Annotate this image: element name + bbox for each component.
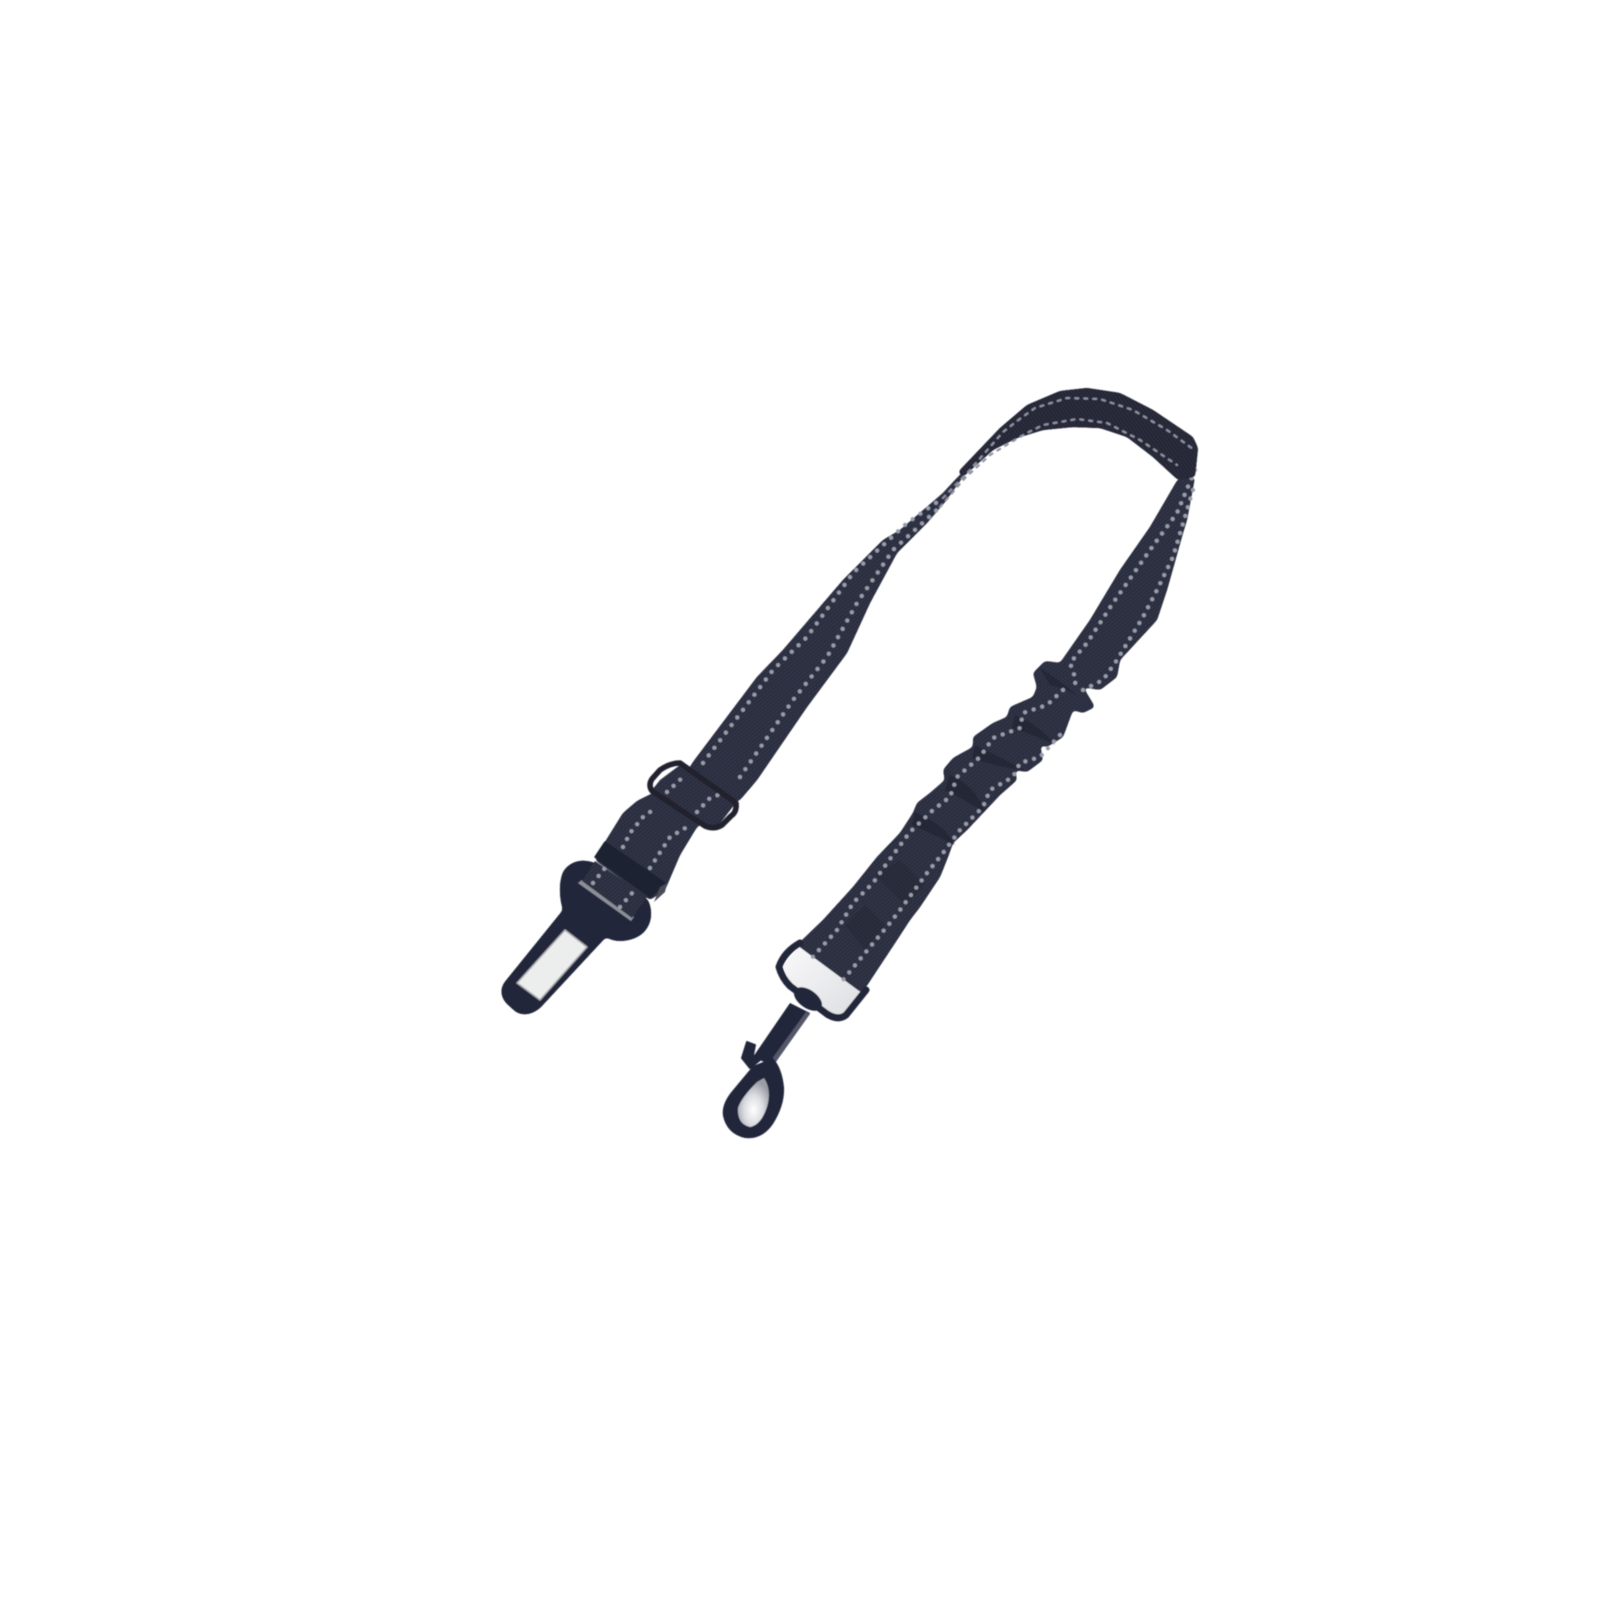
hook loop bbox=[723, 1058, 784, 1138]
seat belt clip buckle bbox=[501, 842, 667, 1014]
thumb lever bbox=[742, 1042, 760, 1068]
bungee fold shadows bbox=[912, 668, 1083, 845]
short strap through buckle bbox=[595, 780, 715, 900]
bungee stitching bbox=[1070, 470, 1195, 691]
upper strap with fold bbox=[685, 388, 1198, 806]
clip slot edge bbox=[578, 880, 634, 921]
adjustment slider bbox=[650, 763, 736, 828]
snap hook bbox=[723, 943, 866, 1138]
lower strap and bungee section bbox=[797, 470, 1195, 993]
short strap stitching bbox=[623, 807, 657, 847]
stitching inside clip bbox=[593, 868, 605, 883]
keeper loop bbox=[595, 842, 665, 897]
barrel bbox=[753, 1003, 810, 1066]
clip window bbox=[517, 930, 587, 1000]
snap hook ring interior bbox=[783, 945, 864, 1016]
strap inside clip bbox=[582, 861, 647, 918]
upper strap stitching bbox=[703, 498, 943, 763]
swivel bbox=[790, 982, 826, 1016]
D-ring bbox=[779, 943, 866, 1018]
hook opening bbox=[738, 1078, 769, 1127]
lower strap reinforcement patches bbox=[845, 860, 925, 950]
